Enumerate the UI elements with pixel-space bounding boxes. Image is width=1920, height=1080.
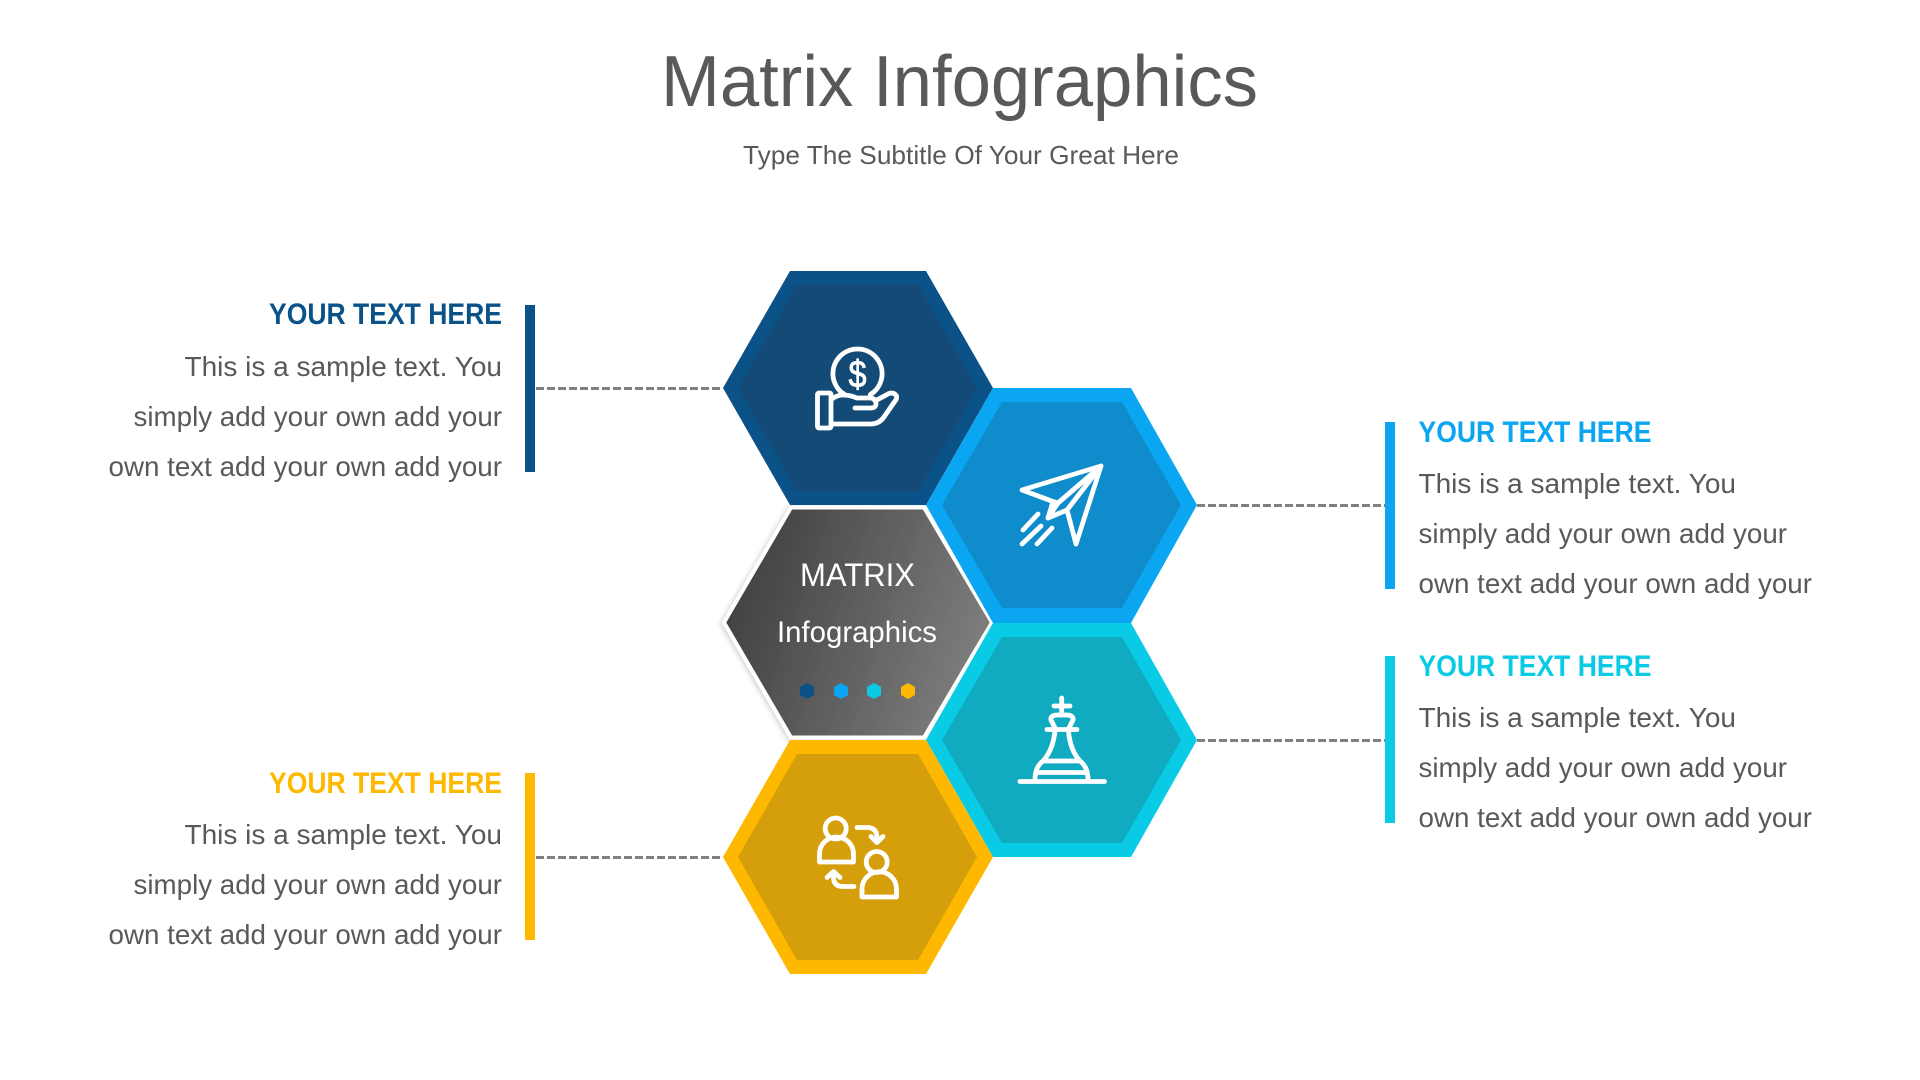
body cyan xyxy=(1418,702,1812,833)
body blue: This is a sample text. You xyxy=(1418,468,1736,499)
panel: cyan text block xyxy=(1385,650,1812,833)
icon: people swap xyxy=(820,818,896,897)
icon: paper plane xyxy=(1022,466,1101,544)
center label xyxy=(777,557,937,649)
heading navy: YOUR TEXT HERE xyxy=(269,298,502,331)
connector: yellow xyxy=(536,856,723,859)
body navy: simply add your own add your xyxy=(134,401,502,432)
body blue: simply add your own add your xyxy=(1418,518,1787,549)
heading blue: YOUR TEXT HERE xyxy=(1418,416,1652,449)
icon: hand holding coin: $ xyxy=(848,354,866,396)
center label: MATRIX xyxy=(800,557,915,593)
accent bar navy xyxy=(525,305,535,472)
icon: chess king xyxy=(1020,698,1104,782)
body navy: own text add your own add your xyxy=(108,451,502,482)
colour dots xyxy=(800,683,915,699)
icon: hand holding coin xyxy=(818,349,897,428)
body yellow: simply add your own add your xyxy=(134,869,502,900)
body navy: This is a sample text. You xyxy=(184,351,502,382)
body cyan: simply add your own add your xyxy=(1418,752,1787,783)
body blue xyxy=(1418,468,1812,599)
body cyan: This is a sample text. You xyxy=(1418,702,1736,733)
heading cyan: YOUR TEXT HERE xyxy=(1418,650,1652,683)
title: Matrix Infographics xyxy=(661,42,1258,122)
connector: blue xyxy=(1197,504,1385,507)
subtitle: Type The Subtitle Of Your Great Here xyxy=(743,140,1179,170)
body blue: own text add your own add your xyxy=(1418,568,1812,599)
connector: navy xyxy=(536,387,723,390)
body yellow: own text add your own add your xyxy=(108,919,502,950)
panel: yellow text block xyxy=(108,767,535,950)
hexagon: yellow xyxy=(723,740,993,974)
accent bar yellow xyxy=(525,773,535,940)
hexagon: cyan xyxy=(926,623,1197,857)
center label: Infographics xyxy=(777,616,937,649)
accent bar blue xyxy=(1385,422,1395,589)
connector: cyan xyxy=(1197,739,1385,742)
hexagon: navy xyxy=(723,271,993,505)
panel: blue text block xyxy=(1385,416,1812,599)
hexagon: center xyxy=(724,508,992,738)
hexagon: blue xyxy=(926,388,1197,623)
body yellow: This is a sample text. You xyxy=(184,819,502,850)
accent bar cyan xyxy=(1385,656,1395,823)
body cyan: own text add your own add your xyxy=(1418,802,1812,833)
heading yellow: YOUR TEXT HERE xyxy=(269,767,502,800)
body yellow xyxy=(108,819,502,950)
panel: navy text block xyxy=(108,298,535,482)
body navy xyxy=(108,351,502,482)
